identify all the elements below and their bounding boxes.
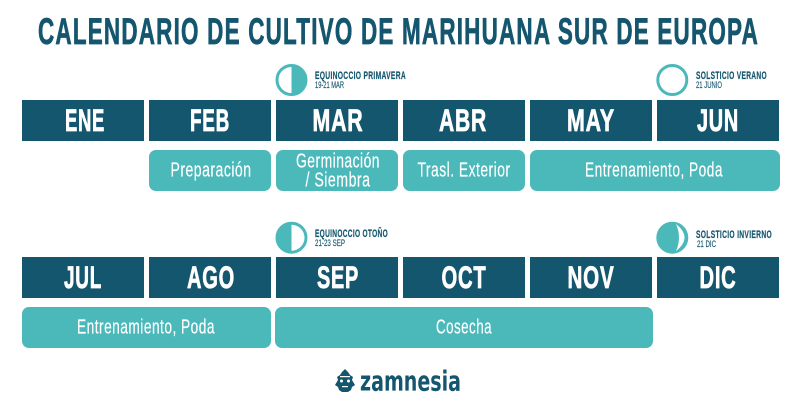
month: SEP: SEP: [317, 259, 359, 295]
month: FEB: FEB: [190, 102, 230, 138]
activity: Germinación / Siembra: / Siembra: [306, 170, 371, 192]
month: ABR: [403, 100, 525, 141]
activity: Entrenamiento, Poda: Entrenamiento, Poda: [585, 160, 723, 182]
activity: Preparación: Preparación: [170, 160, 252, 182]
icon: logo mask: [335, 369, 355, 392]
month: OCT: OCT: [442, 259, 486, 295]
month: JUL: JUL: [64, 259, 102, 295]
month: ENE: [22, 100, 144, 141]
month: MAY: MAY: [567, 102, 615, 138]
label: spring equinox: [315, 70, 406, 91]
month: NOV: NOV: [568, 259, 614, 295]
month: ABR: ABR: [439, 102, 487, 138]
icon: autumn equinox half moon: [277, 223, 306, 252]
month: MAR: MAR: [312, 102, 364, 138]
label: autumn equinox: [315, 227, 388, 249]
activity: Trasl. Exterior: Trasl. Exterior: [418, 160, 510, 182]
month row 1: [22, 100, 779, 141]
activity: Germinación / Siembra: Germinación: [296, 150, 380, 172]
activity: Cosecha: [275, 307, 653, 348]
month: JUN: JUN: [697, 102, 739, 138]
icon: summer solstice ring: [658, 66, 687, 94]
month: DIC: DIC: [700, 259, 736, 295]
icon: spring equinox half moon: [277, 66, 306, 94]
month: SEP: [276, 257, 398, 298]
activity: Germinación / Siembra: [276, 150, 398, 192]
activity: Entrenamiento, Poda: [530, 150, 780, 191]
label: spring equinox: 19-21 MAR: [315, 80, 344, 91]
label: summer solstice: 21 JUNIO: [696, 80, 722, 91]
logo: zamnesia: [335, 364, 461, 398]
month: ENE: ENE: [65, 102, 105, 138]
activity: Cosecha: Cosecha: [436, 316, 492, 338]
activity row 1: [149, 150, 780, 192]
activity: Entrenamiento, Poda: [22, 307, 271, 348]
wordmark: zamnesia: [360, 364, 461, 398]
month: OCT: [403, 257, 525, 298]
month: FEB: [149, 100, 271, 141]
month: AGO: AGO: [187, 259, 235, 295]
month: MAR: [276, 100, 398, 141]
month: DIC: [657, 257, 779, 298]
activity: Preparación: [149, 150, 271, 191]
label: winter solstice: [696, 229, 772, 250]
month: JUN: [657, 100, 779, 141]
month: JUL: [22, 257, 144, 298]
activity: Entrenamiento, Poda: Entrenamiento, Poda: [77, 316, 215, 338]
activity row 2: [22, 307, 653, 348]
label: autumn equinox: 21-23 SEP: [315, 238, 345, 249]
month: MAY: [530, 100, 652, 141]
month: NOV: [530, 257, 652, 298]
label: summer solstice: [696, 70, 767, 91]
activity: Trasl. Exterior: [403, 150, 525, 191]
label: autumn equinox: EQUINOCCIO OTOÑO: [315, 227, 388, 240]
label: spring equinox: EQUINOCCIO PRIMAVERA: [315, 70, 406, 82]
label: winter solstice: 21 DIC: [697, 239, 716, 250]
month: AGO: [149, 257, 271, 298]
month row 2: [22, 257, 779, 298]
icon: winter solstice crescent: [656, 222, 688, 254]
